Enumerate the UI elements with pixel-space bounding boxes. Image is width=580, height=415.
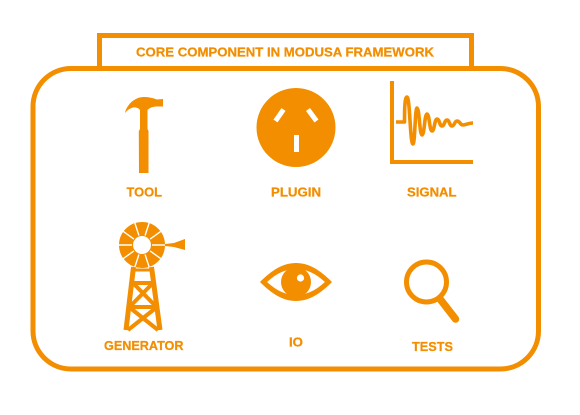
icon: magnifying glass (406, 262, 456, 319)
icon: signal chart (392, 81, 473, 162)
icon: hammer (125, 97, 163, 173)
label: generator: GENERATOR (104, 339, 184, 353)
label: tool: TOOL (126, 186, 162, 200)
label: tests: TESTS (412, 340, 453, 354)
label: plugin: PLUGIN (271, 186, 321, 200)
label: signal: SIGNAL (407, 186, 457, 200)
icon: windmill (118, 222, 185, 330)
title box (100, 36, 472, 68)
icon: plug (256, 88, 336, 167)
icon: eye (260, 263, 332, 301)
panel: main rounded frame (33, 68, 538, 369)
label: io: IO (289, 336, 303, 350)
title: CORE COMPONENT IN MODUSA FRAMEWORK (136, 46, 434, 60)
